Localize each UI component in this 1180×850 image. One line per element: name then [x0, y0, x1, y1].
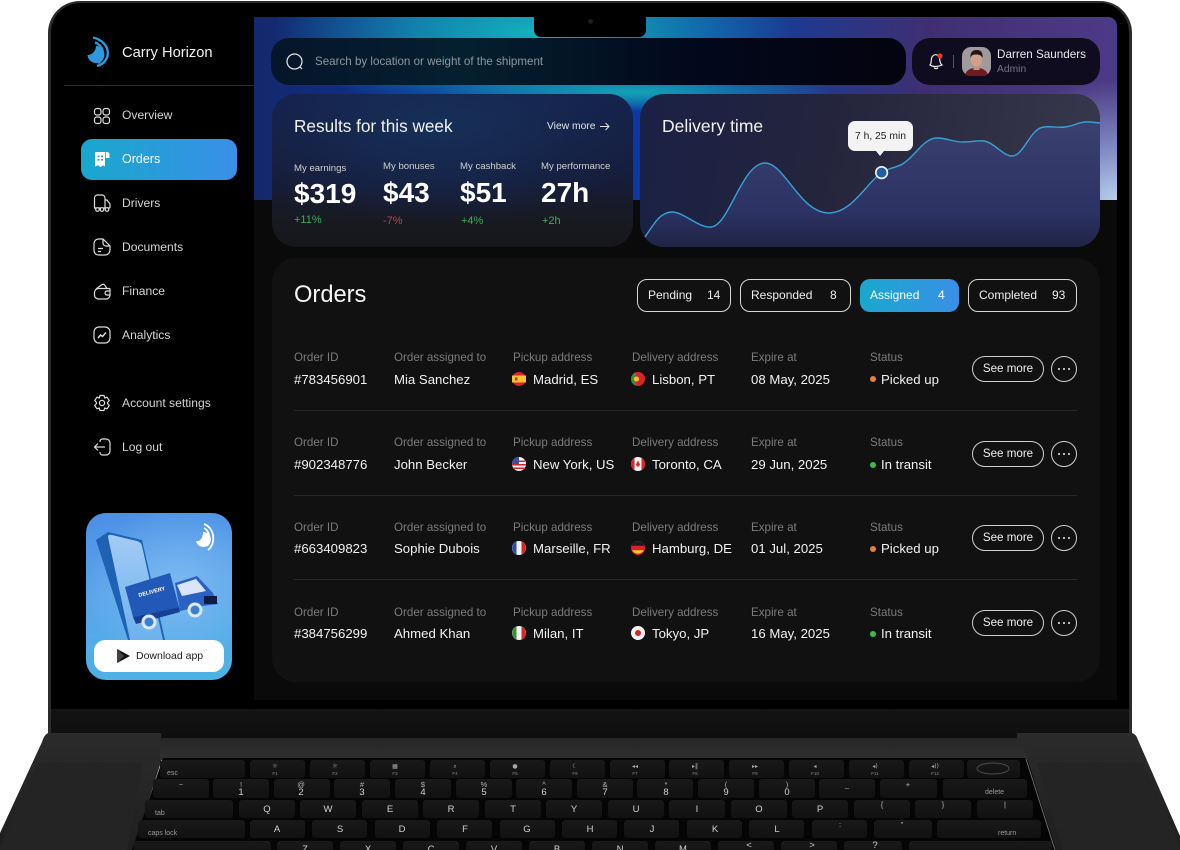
letter and digit legends: 1 [238, 787, 244, 798]
order row 1: Expire at [751, 351, 797, 364]
tab: completed: Completed [979, 288, 1037, 302]
upper symbol legends: : [839, 820, 841, 829]
keyboard legends: delete [985, 789, 1004, 796]
tab: assigned: Assigned [870, 288, 919, 302]
function key icons: ☾ [572, 763, 578, 770]
upper symbol legends: ~ [179, 780, 184, 789]
tab: assigned [860, 279, 959, 312]
stat: bonuses [383, 161, 435, 227]
order row 1: Pickup address [513, 351, 592, 364]
function key icons: ☼ [332, 763, 338, 770]
order row 1: Lisbon, PT [652, 372, 715, 386]
icon: arrow [600, 122, 610, 130]
order row 2: New York, US [533, 456, 614, 472]
function key legends [272, 771, 939, 776]
keyboard legends: caps lock [148, 830, 178, 837]
menu: log out: Log out [122, 440, 162, 454]
order row 3: #663409823 [294, 541, 367, 556]
menu: overview: Overview [122, 108, 172, 122]
more menu button [1051, 610, 1077, 636]
order row 2: Expire at [751, 436, 797, 448]
icon: settings [94, 394, 110, 412]
letter and digit legends: J [650, 824, 655, 835]
camera notch [534, 15, 646, 37]
dashboard dark area [254, 200, 1117, 700]
stat: performance: +2h [542, 215, 561, 227]
letter and digit legends: K [712, 824, 719, 835]
order row 3: Marseille, FR [533, 541, 611, 556]
upper symbol legends: { [881, 800, 884, 809]
search placeholder: Search by location or weight of the shipment [315, 55, 543, 68]
upper symbol legends: } [942, 800, 945, 809]
laptop chin [51, 709, 1129, 739]
letter and digit legends: 7 [602, 787, 608, 798]
menu: drivers: Drivers [122, 196, 160, 210]
flag: Japan [631, 626, 645, 640]
orders heading: Orders [294, 282, 366, 308]
view more link: View more [547, 121, 595, 132]
keyboard legends [148, 770, 1016, 837]
order row 2: John Becker [394, 456, 467, 472]
letter and digit legends: Q [263, 804, 271, 815]
letter and digit legends: 8 [663, 787, 669, 798]
order row 1: Mia Sanchez [394, 372, 470, 386]
stat: performance: 27h [541, 177, 589, 208]
order row 4: Pickup address [513, 606, 592, 618]
stat: performance [541, 161, 610, 227]
order row 3: Delivery address [632, 520, 718, 534]
function key legends: F1 [272, 771, 278, 776]
order row 2: #902348776 [294, 456, 367, 472]
stat: cashback: $51 [460, 177, 507, 208]
order row 3: Status [870, 520, 903, 534]
stat: cashback: +4% [461, 215, 483, 227]
letter and digit legends: 2 [298, 787, 304, 798]
keyboard keys [134, 760, 1052, 850]
order row 3: Picked up [881, 541, 939, 556]
function key legends: F2 [332, 771, 338, 776]
download button [94, 640, 224, 672]
function key icons: ◂) [872, 763, 878, 770]
see more button: See more [983, 362, 1033, 375]
tab: assigned: 4 [938, 288, 945, 302]
see more button: See more [983, 616, 1033, 629]
letter and digit legends: I [696, 804, 698, 815]
order row 3: Expire at [751, 520, 797, 534]
order row 4: Expire at [751, 606, 797, 618]
letter and digit legends: L [774, 824, 780, 835]
icon: finance [94, 284, 111, 300]
order row 2: Toronto, CA [652, 456, 722, 472]
order row 4: Order assigned to [394, 606, 486, 618]
user role: Admin [997, 64, 1026, 75]
icon: drivers [94, 194, 111, 212]
flag: Spain [512, 372, 526, 386]
panel: delivery time [640, 94, 1100, 247]
sidebar [64, 36, 254, 86]
upper symbol legends: ^ [542, 780, 546, 789]
order row 2: Order assigned to [394, 436, 486, 448]
letter and digit legends: 3 [359, 787, 365, 798]
letter and digit legends: Y [571, 804, 578, 815]
see more button [972, 356, 1044, 382]
status dot [870, 546, 876, 552]
tooltip [848, 121, 913, 151]
letter and digit legends: 0 [784, 787, 790, 798]
upper symbol legends [179, 780, 1006, 829]
upper symbol legends: ( [725, 780, 728, 789]
order row 3: Sophie Dubois [394, 541, 480, 556]
letter and digit legends [238, 787, 878, 850]
heading: Delivery time [662, 116, 763, 136]
function key legends: F3 [392, 771, 398, 776]
stat: earnings: +11% [294, 214, 322, 226]
letter and digit legends: 5 [481, 787, 487, 798]
order row 2: In transit [881, 456, 932, 472]
order row 1: Picked up [881, 372, 939, 386]
function key legends: F7 [632, 771, 638, 776]
flag: Germany [631, 541, 645, 555]
flag: Canada [631, 457, 645, 471]
function key icons: ◂◂ [632, 763, 638, 770]
order row 1 [294, 351, 939, 386]
order row 4: 16 May, 2025 [751, 626, 830, 641]
more menu button [1051, 525, 1077, 551]
order row 2: 29 Jun, 2025 [751, 456, 827, 472]
status dot [870, 462, 876, 468]
letter and digit legends: G [523, 824, 531, 835]
stat: cashback: My cashback [460, 161, 516, 172]
flag: Portugal [631, 372, 645, 386]
upper symbol legends: + [906, 780, 911, 789]
stat: earnings [294, 163, 356, 226]
order row 4: Tokyo, JP [652, 626, 709, 641]
menu: account settings: Account settings [122, 396, 211, 410]
panel: results for this week [272, 94, 633, 247]
search bar [271, 38, 906, 85]
function key icons: ⌕ [453, 763, 457, 770]
menu: documents: Documents [122, 240, 183, 254]
keyboard well [132, 758, 1056, 850]
order row 1: 08 May, 2025 [751, 372, 830, 386]
flag: France [512, 541, 526, 555]
upper symbol legends: * [665, 780, 668, 789]
stat: bonuses: $43 [383, 177, 430, 208]
tab: pending: 14 [707, 288, 720, 302]
icon: analytics [93, 326, 111, 344]
menu: finance: Finance [122, 284, 165, 298]
download app card [86, 513, 232, 680]
illustration: phone and truck: DELIVERY [138, 586, 166, 599]
order row 3: Order assigned to [394, 520, 486, 534]
keyboard legends: esc [167, 770, 178, 777]
icon: log out [94, 438, 111, 456]
flag: Italy [512, 626, 526, 640]
menu: analytics: Analytics [122, 328, 170, 342]
order row 2: Pickup address [513, 436, 592, 448]
profile pill [912, 38, 1100, 85]
upper symbol legends: ! [240, 780, 242, 789]
more menu button [1051, 356, 1077, 382]
order row 1: Order ID [294, 351, 338, 364]
function key legends: F10 [811, 771, 819, 776]
order row 1: Delivery address [632, 351, 718, 364]
stat: cashback [460, 161, 516, 227]
function key icons: ▸‖ [692, 763, 698, 770]
menu: orders: Orders [122, 152, 160, 166]
avatar [962, 47, 991, 76]
letter and digit legends: P [817, 804, 823, 815]
function key legends: F5 [512, 771, 518, 776]
letter and digit legends: R [448, 804, 455, 815]
illustration: phone and truck [96, 523, 218, 640]
laptop lid [48, 1, 1132, 739]
stat: bonuses: -7% [383, 215, 403, 227]
upper symbol legends: & [602, 780, 608, 789]
function key icons: ● [512, 763, 518, 770]
function key legends: F4 [452, 771, 458, 776]
tab: pending: Pending [648, 288, 692, 302]
letter and digit legends: A [274, 824, 281, 835]
order row 4: Milan, IT [533, 626, 584, 641]
icon: documents [93, 238, 111, 256]
see more button: See more [983, 531, 1033, 544]
letter and digit legends: H [587, 824, 594, 835]
function key legends: F9 [752, 771, 758, 776]
upper symbol legends: _ [844, 780, 850, 789]
letter and digit legends: E [387, 804, 393, 815]
stat: bonuses: My bonuses [383, 161, 435, 172]
download button: Download app [136, 650, 203, 662]
laptop base left speaker [0, 733, 161, 850]
letter and digit legends: S [337, 824, 343, 835]
line chart [644, 121, 1100, 247]
logo [88, 36, 109, 68]
order row 3 [294, 520, 939, 556]
flag: USA [512, 457, 526, 471]
brand name: Carry Horizon [122, 44, 213, 60]
tooltip: 7 h, 25 min [855, 131, 906, 142]
function key icons: ◂)) [931, 763, 939, 770]
order row 3: Hamburg, DE [652, 541, 732, 556]
order row 3: Pickup address [513, 520, 592, 534]
letter and digit legends: 6 [541, 787, 547, 798]
keyboard legends: tab [155, 810, 165, 817]
icon: search [286, 53, 303, 70]
order row 2: Delivery address [632, 436, 718, 448]
letter and digit legends: F [462, 824, 468, 835]
stat: earnings: $319 [294, 178, 356, 209]
order row 3: 01 Jul, 2025 [751, 541, 823, 556]
letter and digit legends: O [755, 804, 763, 815]
function key icons: ▸▸ [752, 763, 758, 770]
upper symbol legends: @ [297, 780, 305, 789]
order row 4: Ahmed Khan [394, 626, 470, 641]
order row 4: Order ID [294, 606, 338, 618]
letter and digit legends: 9 [723, 787, 729, 798]
order row 1: #783456901 [294, 372, 367, 386]
function key icons: ◂ [813, 763, 817, 770]
letter and digit legends: D [399, 824, 406, 835]
user name: Darren Saunders [997, 48, 1086, 61]
icon: notification bell [929, 53, 944, 70]
tab: pending [637, 279, 731, 312]
active menu highlight [81, 139, 237, 180]
see more button [972, 441, 1044, 467]
see more button [972, 525, 1044, 551]
upper symbol legends: | [1004, 800, 1006, 809]
upper symbol legends: ) [786, 780, 789, 789]
chart marker [876, 167, 887, 178]
icon: overview [94, 108, 110, 124]
icon: orders [95, 152, 110, 167]
letter and digit legends: U [633, 804, 640, 815]
tab: completed [968, 279, 1077, 312]
heading: Results for this week [294, 116, 453, 136]
stat: performance: My performance [541, 161, 610, 172]
upper symbol legends: # [360, 780, 365, 789]
order row 4 [294, 606, 932, 641]
laptop base top deck [160, 738, 1028, 760]
order row 2: Order ID [294, 436, 338, 448]
upper symbol legends: % [481, 780, 488, 789]
order row 1: Order assigned to [394, 351, 486, 364]
order row 1: Madrid, ES [533, 372, 598, 386]
panel: orders [272, 258, 1100, 682]
order row 4: Status [870, 606, 903, 618]
function key icons: ☼ [272, 763, 278, 770]
order row 4: #384756299 [294, 626, 367, 641]
tab: responded: Responded [751, 288, 812, 302]
function key legends: F11 [871, 771, 879, 776]
letter and digit legends: 4 [420, 787, 426, 798]
tab: responded: 8 [830, 288, 837, 302]
see more button: See more [983, 447, 1033, 460]
order row 4: In transit [881, 626, 932, 641]
status dot [870, 376, 876, 382]
stat: earnings: My earnings [294, 163, 346, 174]
order row 4: Delivery address [632, 606, 718, 618]
upper symbol legends: " [901, 820, 904, 829]
upper symbol legends: $ [421, 780, 426, 789]
keyboard legends: return [998, 830, 1016, 837]
tab: responded [740, 279, 851, 312]
screen backdrop [254, 17, 1117, 200]
function key icons: ▦ [392, 763, 398, 770]
order row 2 [294, 436, 932, 472]
function key icons [272, 763, 939, 770]
see more button [972, 610, 1044, 636]
function key legends: F6 [572, 771, 578, 776]
letter and digit legends: W [324, 804, 333, 815]
order row 3: Order ID [294, 520, 338, 534]
tab: completed: 93 [1052, 288, 1065, 302]
more menu button [1051, 441, 1077, 467]
laptop base right speaker [1017, 733, 1180, 850]
letter and digit legends: T [510, 804, 516, 815]
function key legends: F12 [931, 771, 939, 776]
order row 2: Status [870, 436, 903, 448]
function key legends: F8 [692, 771, 698, 776]
status dot [870, 631, 876, 637]
order row 1: Status [870, 351, 903, 364]
